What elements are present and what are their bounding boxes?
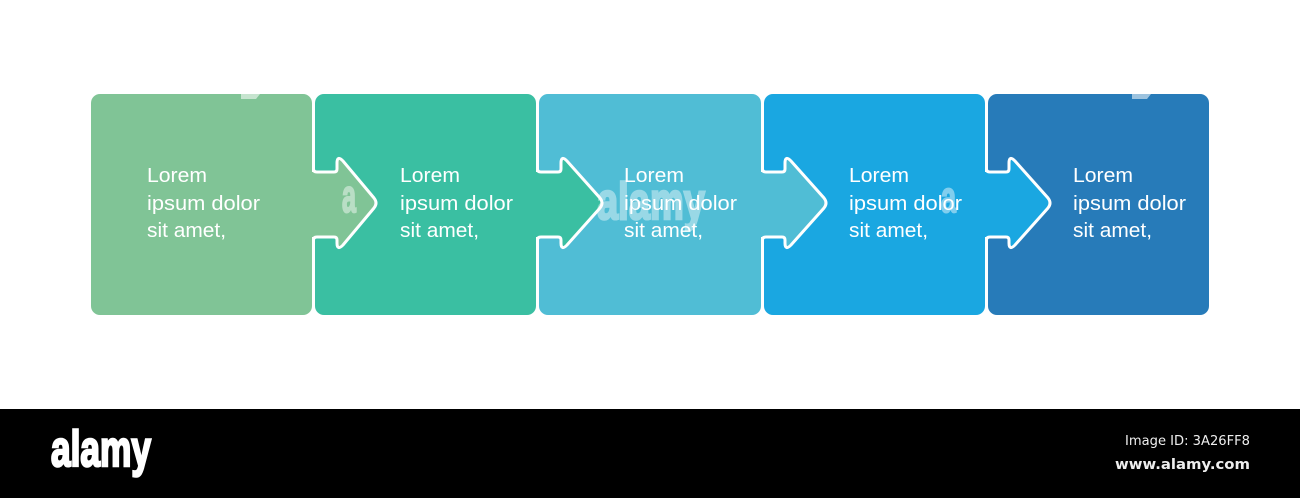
text: step 4 label: sit amet, — [849, 219, 928, 242]
footer bar — [0, 409, 1300, 498]
text: step 1 label: sit amet, — [147, 219, 226, 242]
watermark: center logo: alamy — [597, 173, 705, 231]
text: step 4 label: ipsum dolor — [849, 192, 962, 215]
panel: step 2 — [315, 94, 602, 315]
arrow outline: step 2 to 3 — [538, 100, 602, 310]
text: step 2 label — [400, 164, 513, 242]
text: step 4 label: Lorem — [849, 164, 909, 187]
footer logo: alamy — [51, 421, 151, 477]
watermark: top fragment step 1 — [241, 94, 260, 99]
text: step 5 label: ipsum dolor — [1073, 192, 1186, 215]
text: step 2 label: Lorem — [400, 164, 460, 187]
panel: step 3 — [539, 94, 826, 315]
text: step 5 label — [1073, 164, 1186, 242]
arrow outline: step 4 to 5 — [986, 100, 1050, 310]
text: step 3 label: Lorem — [624, 164, 684, 187]
text: step 2 label: ipsum dolor — [400, 192, 513, 215]
panel: step 5 — [988, 94, 1209, 315]
text: step 3 label — [624, 164, 737, 242]
text: step 2 label: sit amet, — [400, 219, 479, 242]
text: step 1 label — [147, 164, 260, 242]
text: step 1 label: ipsum dolor — [147, 192, 260, 215]
watermark: top fragment step 5 — [1132, 94, 1151, 99]
arrow outline: step 3 to 4 — [762, 100, 826, 310]
text: step 4 label — [849, 164, 962, 242]
text: step 5 label: Lorem — [1073, 164, 1133, 187]
watermark: letter a on step 4: a — [941, 173, 956, 222]
watermark: letter a on arrow: a — [342, 170, 356, 222]
panel: step 4 — [764, 94, 1050, 315]
text: step 5 label: sit amet, — [1073, 219, 1152, 242]
arrow outline: step 1 to 2 — [314, 100, 376, 310]
text: step 3 label: ipsum dolor — [624, 192, 737, 215]
image id: Image ID: 3A26FF8 — [1125, 433, 1250, 449]
panel: step 1 — [91, 94, 376, 315]
text: step 3 label: sit amet, — [624, 219, 703, 242]
text: step 1 label: Lorem — [147, 164, 207, 187]
website: www.alamy.com — [1115, 457, 1250, 473]
